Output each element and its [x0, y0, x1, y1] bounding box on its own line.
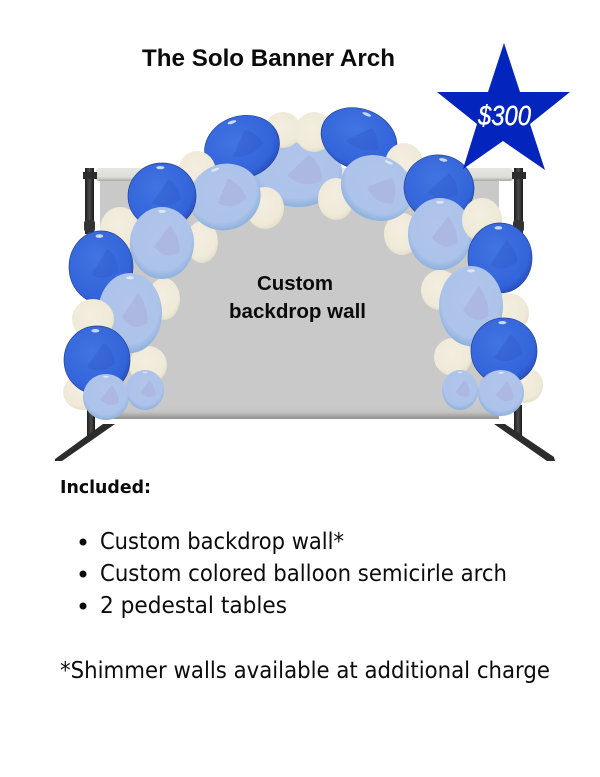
right shoulder cream balloon	[462, 198, 502, 242]
footnote: *Shimmer walls available at additional charge	[60, 658, 550, 684]
left foot	[55, 424, 115, 461]
left pole	[83, 168, 97, 438]
star	[437, 43, 570, 170]
right foot	[494, 424, 555, 461]
item: pedestal tables: 2 pedestal tables	[100, 593, 287, 619]
price: $300	[477, 100, 531, 131]
cream balloons	[63, 112, 543, 410]
item: backdrop wall: Custom backdrop wall*	[100, 529, 344, 555]
title: The Solo Banner Arch	[142, 45, 395, 72]
top roller bar	[96, 168, 513, 181]
item: balloon arch: Custom colored balloon semicirle arch	[100, 561, 507, 587]
top centre light balloon	[254, 137, 342, 207]
backdrop label: backdrop wall	[229, 301, 366, 323]
dark blue balloons bottom	[64, 318, 537, 394]
right cream balloon behind light	[487, 293, 529, 333]
dark blue balloons upper	[128, 148, 480, 229]
light blue balloons lower	[98, 266, 503, 353]
light blue balloons middle	[130, 198, 472, 279]
light blue balloons upper	[180, 143, 424, 240]
included list	[80, 529, 507, 619]
backdrop stand	[55, 168, 555, 461]
included heading: Included:	[60, 478, 151, 498]
small light blue balloons	[83, 370, 524, 420]
right pole	[512, 168, 526, 438]
balloon arch	[63, 97, 543, 420]
price star badge	[437, 43, 570, 170]
backdrop label	[229, 273, 366, 323]
backdrop wall panel	[100, 178, 499, 418]
backdrop label: Custom	[257, 273, 333, 295]
left cream balloon overlapping	[72, 299, 114, 339]
bottom hem of backdrop	[100, 405, 499, 419]
dark blue balloons middle	[69, 223, 532, 303]
dark blue balloons top	[196, 97, 406, 188]
upper cream balloons	[178, 143, 423, 193]
